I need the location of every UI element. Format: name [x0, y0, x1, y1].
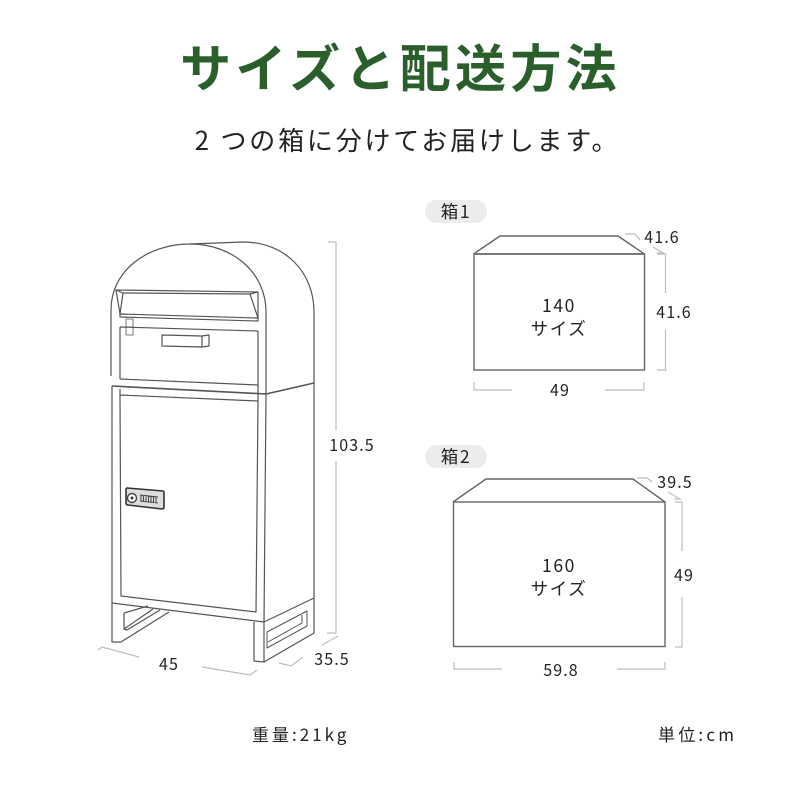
label: box 1 pill [425, 199, 487, 224]
combination lock [126, 488, 164, 509]
box 2 dimension: depth [637, 469, 693, 499]
box 2 dimension: height [674, 502, 694, 647]
dimension: height 103.5 [327, 242, 375, 633]
title: サイズと配送方法 [180, 28, 621, 102]
box 1 outline [474, 236, 644, 370]
belt seam [112, 383, 314, 394]
box 1 dimension: width: 49 [550, 377, 570, 401]
box 2 dimension: width [454, 657, 665, 681]
dimension: depth 35.5: 35.5 [314, 646, 350, 670]
box 2 dimension: height: 49 [674, 562, 694, 586]
box 1 dimension: height [656, 254, 692, 370]
box 1 dimension: depth [625, 224, 680, 253]
box 2 dimension: width: 59.8 [543, 657, 579, 681]
box 1 dimension: depth: 41.6 [644, 224, 680, 248]
mailbox dome [111, 242, 314, 394]
right leg [254, 598, 314, 662]
box 1 size label [531, 293, 587, 341]
mailbox illustration [111, 242, 314, 662]
subtitle: 2 つの箱に分けてお届けします。 [195, 121, 620, 158]
label: box 2 pill: 箱2 [441, 444, 471, 469]
upper door with handle [120, 327, 258, 385]
box 2 size label: サイズ [531, 576, 587, 601]
box 1 dimension: width [474, 377, 644, 401]
box 1 size label: サイズ [531, 316, 587, 341]
unit note: 単位:cm [658, 721, 737, 746]
box 2 size label [531, 553, 587, 601]
label: box 2 pill [425, 444, 487, 469]
label: box 1 pill: 箱1 [441, 199, 471, 224]
dimension: width 45: 45 [159, 651, 179, 675]
box 2 dimension: depth: 39.5 [657, 469, 693, 493]
mail slot flap [116, 290, 258, 321]
box 1 size label: 140 [542, 293, 576, 318]
lower body and door [112, 327, 314, 622]
dimension: width 45 [98, 647, 257, 675]
box 2 outline [453, 479, 665, 646]
box 2 size label: 160 [542, 553, 576, 578]
dimension: height 103.5: 103.5 [329, 432, 375, 456]
left leg [112, 603, 169, 642]
dimension: depth 35.5 [279, 636, 350, 670]
box 1 dimension: height: 41.6 [656, 299, 692, 323]
small latch [125, 319, 133, 335]
weight note: 重量:21kg [252, 721, 349, 746]
